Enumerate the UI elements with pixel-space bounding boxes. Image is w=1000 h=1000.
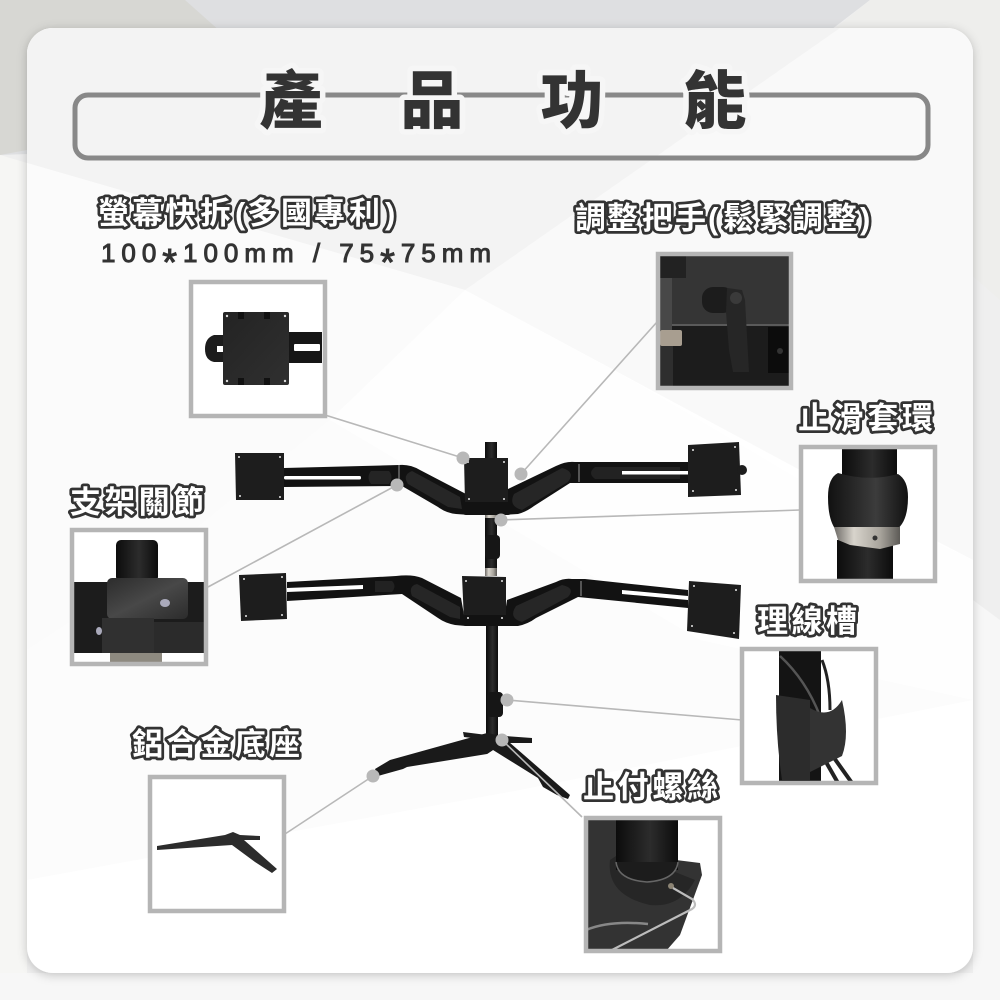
label: quick release: 螢幕快拆(多國專利) (98, 196, 395, 231)
label: VESA sizes: * (162, 242, 177, 284)
photo: adjust handle (658, 254, 791, 388)
label: anti-slip ring: 止滑套環 (798, 401, 933, 436)
base (375, 732, 570, 799)
title text: 功 (540, 67, 604, 137)
lower post clamp (487, 692, 503, 717)
upper right plate (688, 442, 741, 497)
label: set screw: 止付螺絲 (583, 770, 718, 805)
upper centre plate (464, 458, 508, 503)
label: VESA sizes: 100 (101, 238, 156, 268)
lower centre plate (462, 576, 506, 622)
lower left plate (239, 573, 287, 621)
photo: VESA plate (191, 282, 325, 416)
leader lines (208, 322, 800, 834)
photo: anti-slip ring (801, 447, 935, 581)
lower post (486, 622, 498, 738)
title text: 產 (260, 67, 322, 137)
title text: 品 (400, 67, 464, 137)
lower right plate (687, 581, 741, 639)
monitor stand (235, 442, 747, 799)
lower plate under-bracket (462, 615, 514, 626)
label: VESA sizes: 100mm / 75 (183, 238, 374, 268)
lower arm right (503, 579, 688, 626)
label: arm joint: 支架關節 (70, 485, 204, 520)
monitor plates (235, 442, 747, 639)
plate screw holes (238, 446, 737, 634)
upper arm right (503, 462, 688, 515)
title text: 能 (684, 67, 746, 137)
post clamp (485, 535, 500, 559)
photo: aluminium base (150, 777, 284, 911)
silver collars (485, 568, 497, 576)
label: VESA sizes: * (380, 242, 395, 284)
photo: cable slot (742, 649, 876, 783)
upper arm left (284, 465, 470, 515)
lower arm left (287, 575, 466, 626)
upper plate under-bracket (462, 502, 512, 515)
anchor dots (366, 452, 528, 782)
upper left plate (235, 453, 284, 500)
label: adjust handle: 調整把手(鬆緊調整) (575, 201, 870, 236)
title text (260, 67, 746, 137)
label: aluminium base: 鋁合金底座 (132, 727, 300, 762)
photo: set screw (586, 818, 720, 951)
upper post (485, 442, 497, 572)
photo: arm joint (72, 530, 206, 664)
title bar (75, 67, 928, 158)
label: VESA sizes: 75mm (401, 238, 491, 268)
label: cable slot: 理線槽 (757, 604, 857, 639)
